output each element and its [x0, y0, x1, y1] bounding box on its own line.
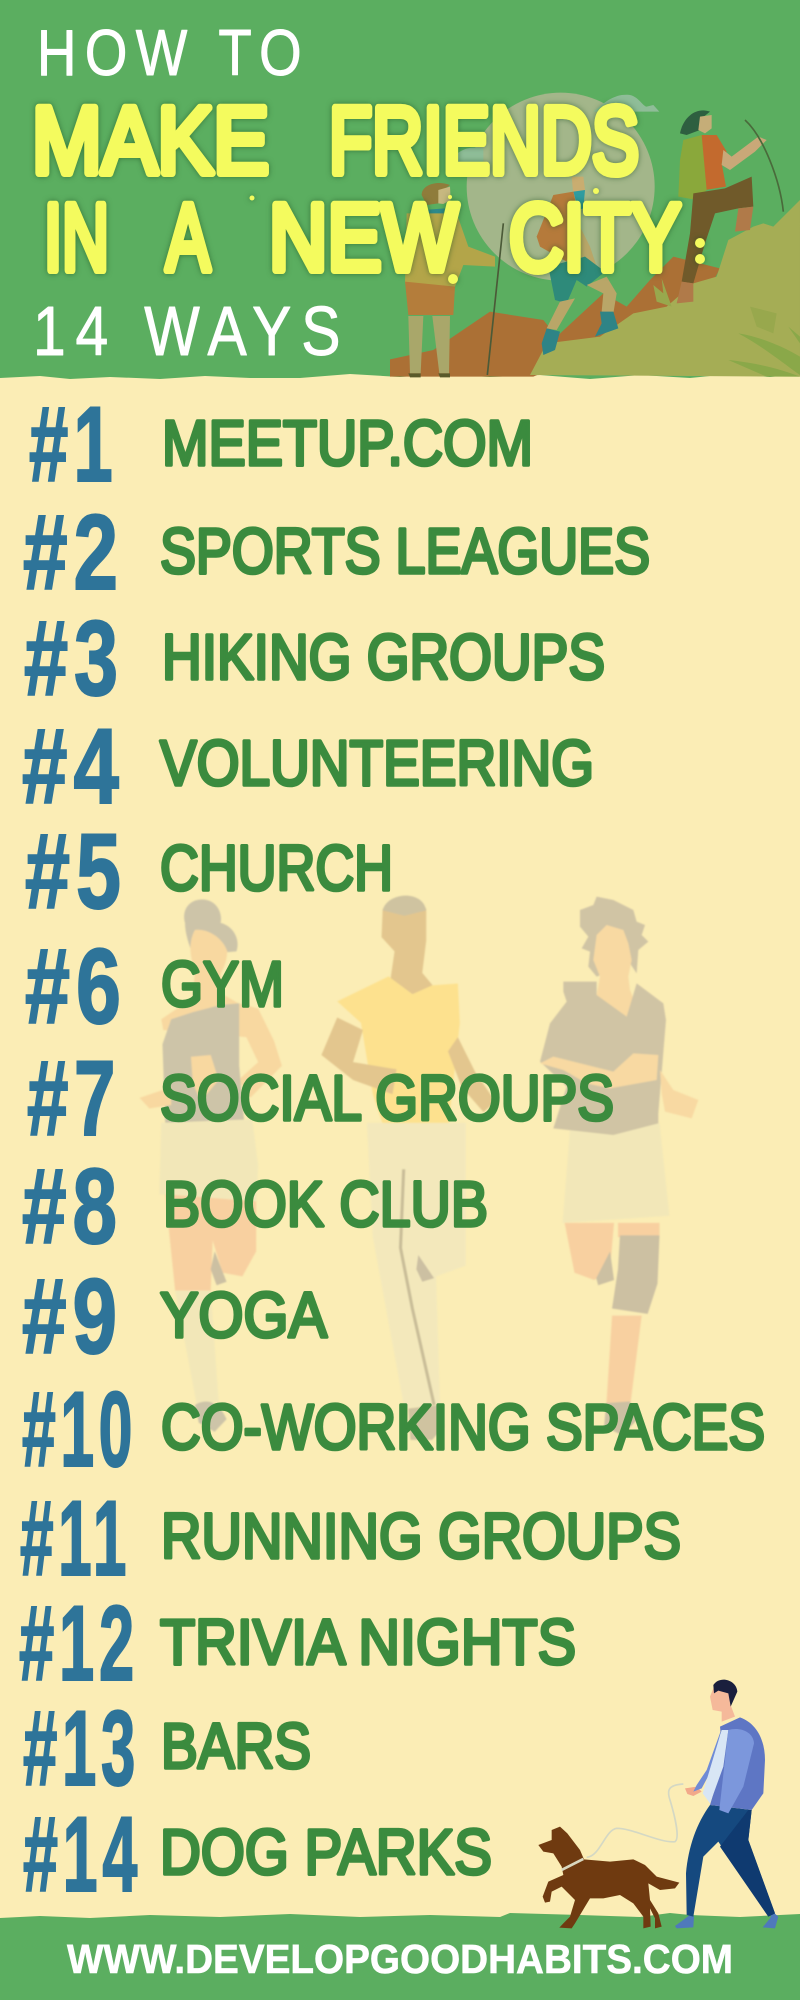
- dog collar: [562, 1859, 583, 1870]
- panel: green header: [0, 0, 800, 379]
- hiker left: [405, 183, 503, 377]
- number 4: #4: [22, 706, 125, 826]
- label hiking groups: HIKING GROUPS: [162, 621, 605, 693]
- label running groups: RUNNING GROUPS: [161, 1500, 681, 1572]
- panel: green footer: [0, 1913, 800, 2000]
- number 13: #13: [23, 1688, 140, 1808]
- list item 3: [24, 598, 605, 718]
- list item 2: [23, 492, 650, 612]
- hiker right: [677, 110, 783, 303]
- list item 7: [27, 1038, 614, 1158]
- number 5: #5: [25, 811, 127, 931]
- illustration: hikers on a hill: [390, 93, 800, 377]
- list item 10: [22, 1369, 765, 1489]
- label book club: BOOK CLUB: [163, 1168, 488, 1240]
- list item 1: [29, 384, 533, 504]
- label sports leagues: SPORTS LEAGUES: [160, 515, 650, 587]
- number 11: #11: [20, 1478, 131, 1598]
- list item 4: [22, 706, 594, 826]
- label dog parks: DOG PARKS: [160, 1816, 492, 1888]
- dog: [538, 1827, 679, 1928]
- word: city: CITY: [509, 185, 681, 291]
- number 2: #2: [23, 492, 124, 612]
- number 7: #7: [27, 1038, 121, 1158]
- label yoga: YOGA: [160, 1279, 327, 1351]
- illustration: faded runners: [140, 896, 698, 1440]
- runner right: [540, 897, 698, 1435]
- heading: how to: HOW TO: [37, 17, 308, 89]
- label trivia nights: TRIVIA NIGHTS: [160, 1606, 576, 1678]
- word: new: NEW: [269, 185, 458, 291]
- word: make: MAKE: [32, 88, 269, 194]
- number 10: #10: [22, 1369, 137, 1489]
- heading: make friends in a new city: [32, 88, 705, 291]
- illustration: man walking dog: [538, 1680, 778, 1928]
- label bars: BARS: [161, 1710, 311, 1782]
- number 6: #6: [25, 926, 127, 1046]
- number 12: #12: [19, 1583, 139, 1703]
- man: [675, 1680, 778, 1928]
- runner middle: [321, 896, 495, 1440]
- word: friends: FRIENDS: [329, 88, 639, 194]
- list item 6: [25, 926, 284, 1046]
- list item 9: [22, 1256, 327, 1376]
- list item 13: [23, 1688, 311, 1808]
- label social groups: SOCIAL GROUPS: [160, 1062, 614, 1134]
- label church: CHURCH: [160, 832, 393, 904]
- number 1: #1: [29, 384, 118, 504]
- label gym: GYM: [161, 948, 284, 1020]
- number 14: #14: [23, 1794, 142, 1914]
- list item 11: [20, 1478, 681, 1598]
- word: in: IN: [44, 185, 109, 291]
- number 8: #8: [22, 1146, 123, 1266]
- footer website url: WWW.DEVELOPGOODHABITS.COM: [67, 1936, 733, 1982]
- heading: 14 ways: 14 WAYS: [33, 291, 347, 370]
- number 3: #3: [24, 598, 124, 718]
- list item 14: [23, 1794, 492, 1914]
- list item 8: [22, 1146, 488, 1266]
- list item 12: [19, 1583, 576, 1703]
- runner left: [140, 899, 282, 1432]
- number 9: #9: [22, 1256, 123, 1376]
- colon and paint splats: [250, 188, 705, 284]
- list item 5: [25, 811, 393, 931]
- word: a: A: [166, 185, 210, 291]
- label meetup: MEETUP.COM: [162, 407, 533, 479]
- hiker middle: [537, 177, 618, 355]
- label volunteering: VOLUNTEERING: [160, 727, 594, 799]
- leash: [587, 1784, 683, 1857]
